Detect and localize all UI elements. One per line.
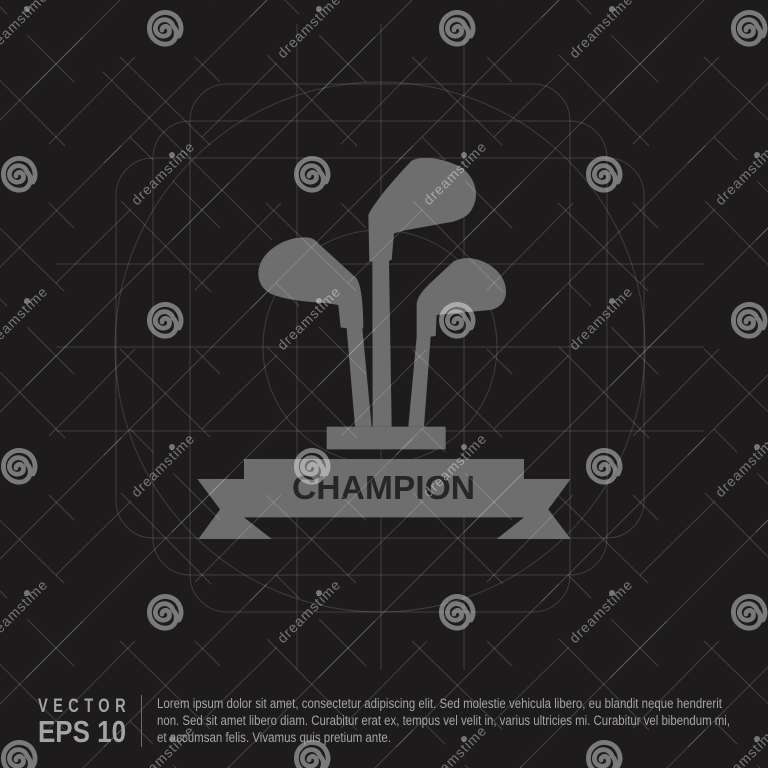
icon: golf clubs with champion ribbon — [197, 158, 571, 539]
watermark text: dreamstime — [420, 431, 489, 500]
icon: club stand base — [327, 427, 446, 449]
watermark text: dreamstime — [274, 577, 343, 646]
footer badge: VECTOR EPS 10 — [38, 694, 131, 749]
footer description text — [157, 696, 730, 745]
label: VECTOR: VECTOR — [38, 694, 131, 717]
watermark text: dreamstime — [128, 139, 197, 208]
watermark text: dreamstime — [274, 284, 343, 353]
icon construction grid — [56, 24, 704, 670]
label: EPS 10: EPS 10 — [38, 714, 126, 749]
footer divider — [141, 695, 142, 747]
watermark text: dreamstime — [128, 431, 197, 500]
watermark text: dreamstime — [566, 577, 635, 646]
watermark text: dreamstime — [566, 284, 635, 353]
watermark text: dreamstime — [420, 139, 489, 208]
ribbon banner — [197, 459, 571, 539]
icon: centre golf club — [368, 158, 476, 427]
ribbon label: CHAMPION: CHAMPION — [292, 469, 475, 506]
icon: left golf club — [258, 237, 372, 427]
icon: right golf club — [408, 258, 506, 427]
footer description text: et accumsan felis. Vivamus quis pretium ante. — [157, 730, 391, 745]
